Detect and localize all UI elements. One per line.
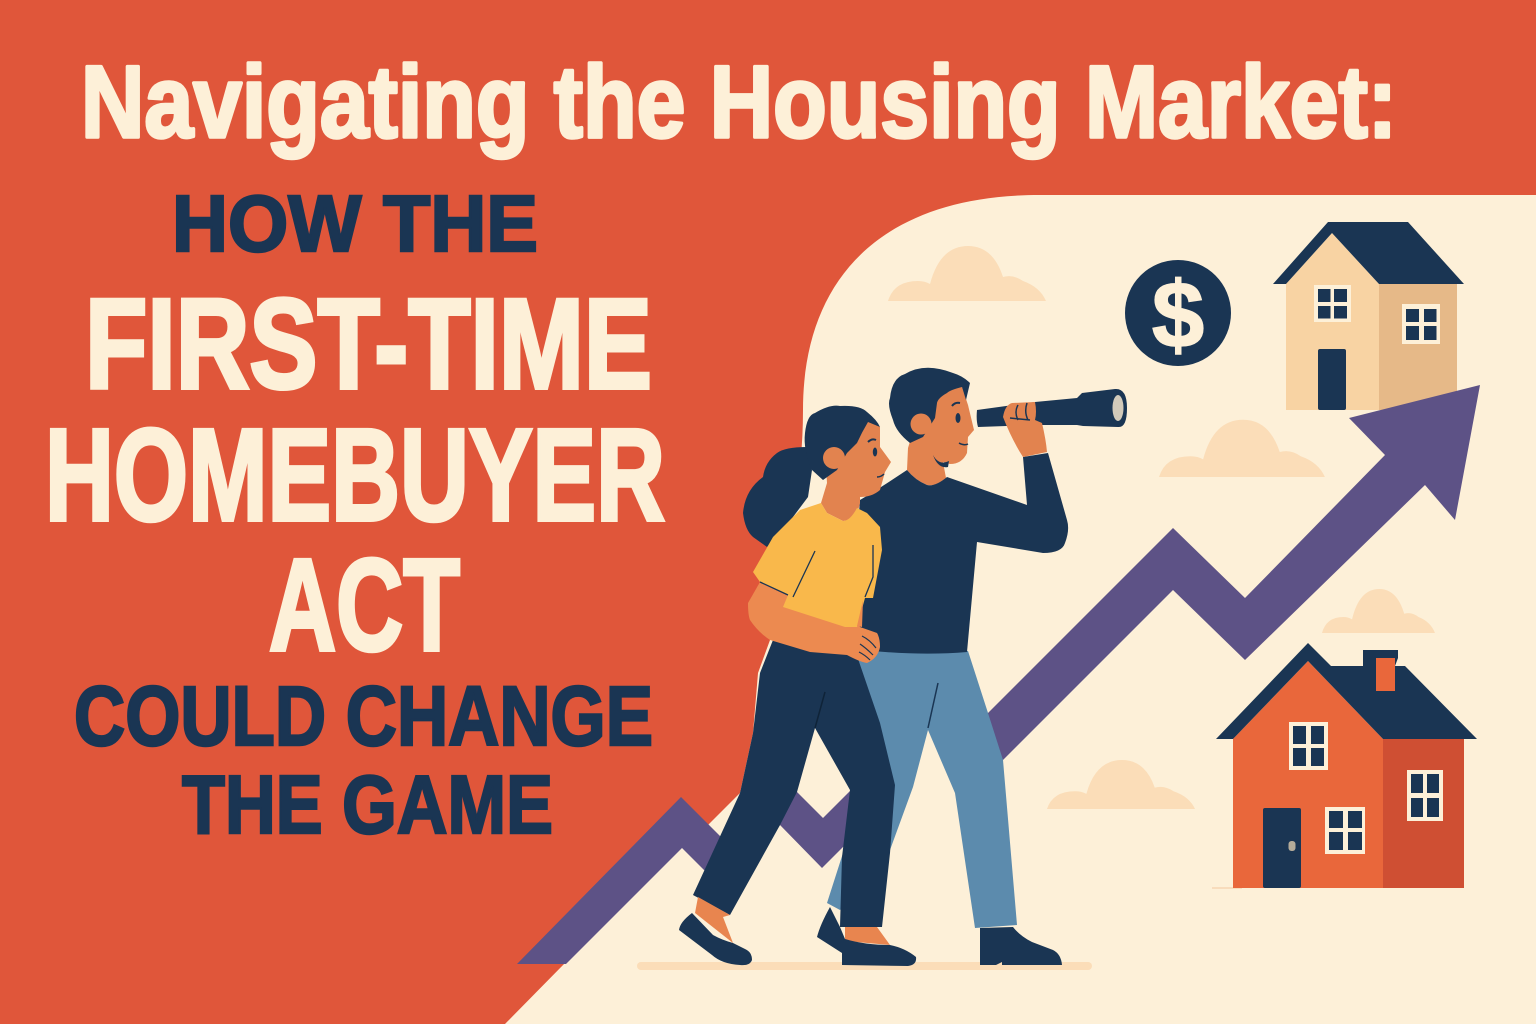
- man trousers: [827, 650, 1017, 928]
- woman shirt: [753, 503, 882, 627]
- subtitle line: could change: COULD CHANGE: [74, 669, 653, 763]
- figure: woman: [679, 406, 916, 966]
- ground shadow: [637, 962, 1092, 970]
- man ear: [910, 414, 932, 434]
- woman trousers: [693, 640, 895, 927]
- icon: orange house: [1212, 643, 1477, 888]
- house side wall: [1379, 284, 1457, 410]
- subtitle line: homebuyer: HOMEBUYER: [45, 401, 665, 548]
- subtitle line: how the: HOW THE: [172, 179, 538, 268]
- subtitle line: act: ACT: [269, 531, 460, 678]
- ground line: [1212, 888, 1242, 889]
- woman front shoe: [817, 907, 916, 966]
- man eye: [956, 413, 960, 423]
- icon: beige house: [1273, 222, 1464, 410]
- house roof: [1273, 222, 1464, 284]
- woman back foot: [695, 897, 733, 943]
- subtitle line: the game: THE GAME: [182, 758, 553, 851]
- house roof: [1216, 643, 1477, 739]
- man neck and face: [907, 385, 974, 485]
- cloud: lower: [1047, 760, 1195, 809]
- arrow lower segment: [517, 761, 880, 964]
- woman face and neck: [821, 412, 891, 521]
- window upper: [1289, 722, 1328, 770]
- telescope: [977, 389, 1127, 427]
- man trouser crease: [928, 683, 938, 728]
- telescope lens: [1112, 395, 1124, 421]
- woman trouser crease: [815, 692, 825, 728]
- woman ear: [823, 447, 845, 469]
- arrow upper segment: [975, 385, 1480, 788]
- man hair: [889, 368, 970, 443]
- arrow: rising market trend: [517, 385, 1480, 964]
- house side wall: [1383, 739, 1464, 888]
- woman back shoe: [679, 913, 752, 965]
- woman eyebrow: [868, 439, 876, 442]
- woman waist skin: [857, 600, 863, 627]
- house front wall: [1286, 233, 1379, 410]
- man shoe: [980, 927, 1062, 965]
- man sweater: [850, 453, 1068, 654]
- woman shirt folds: [760, 545, 873, 597]
- door knob: [1288, 841, 1296, 851]
- man smile: [959, 443, 968, 445]
- woman finger lines: [859, 636, 876, 660]
- woman arm: [748, 582, 880, 663]
- woman front foot: [845, 927, 890, 945]
- house window front: [1314, 285, 1351, 322]
- door: [1263, 808, 1301, 888]
- window side: [1407, 770, 1443, 821]
- chimney: [1376, 658, 1395, 691]
- cloud: top left: [888, 246, 1046, 301]
- house door: [1318, 349, 1346, 410]
- man eyebrow: [952, 403, 960, 406]
- woman smile: [877, 474, 884, 477]
- cloud: right: [1322, 589, 1435, 633]
- heading: subtitle block: [45, 179, 665, 851]
- subtitle line: first-time: FIRST-TIME: [85, 273, 652, 416]
- window lower: [1325, 807, 1365, 854]
- woman hair: [805, 406, 880, 480]
- man hand: [1003, 402, 1047, 457]
- house window side: [1402, 304, 1440, 344]
- woman eye: [873, 448, 877, 456]
- man jaw shadow: [933, 455, 949, 467]
- icon: dollar coin: $: [1152, 262, 1204, 367]
- woman ponytail: [743, 447, 812, 547]
- figure: man with telescope: [827, 368, 1127, 965]
- background: cream panel: [505, 195, 1536, 1024]
- icon: dollar coin: [1125, 260, 1231, 367]
- house front wall: [1233, 661, 1383, 888]
- man fingers: [1010, 403, 1030, 420]
- cloud: middle: [1159, 420, 1325, 477]
